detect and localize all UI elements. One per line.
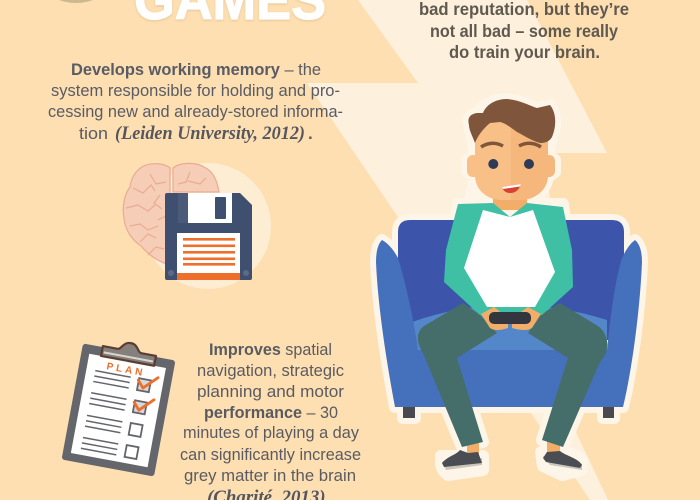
intro text: not all bad – some really [430, 21, 618, 41]
face [475, 122, 548, 200]
icon: brain and floppy disk [123, 163, 271, 289]
sofa back [398, 220, 624, 340]
text block: spatial navigation: grey matter in the brain [184, 466, 356, 485]
teal raglan shirt [444, 203, 573, 315]
intro text [419, 0, 629, 62]
intro text: do train your brain. [449, 42, 600, 62]
right shoe [543, 451, 582, 468]
checkboxes [125, 378, 151, 459]
icon: brain [123, 163, 219, 265]
text block: spatial navigation: Improves spatial [209, 340, 332, 359]
lightning bolt background shape [307, 0, 608, 500]
text block: working memory: cessing new and already-stored informa- [48, 102, 343, 121]
right leg [528, 303, 607, 447]
neck [493, 188, 527, 210]
text block: working memory: . [308, 124, 313, 143]
text block: working memory: system responsible for holding and pro- [51, 81, 340, 100]
left shoe [442, 450, 482, 467]
sofa feet [403, 405, 614, 418]
eyes [488, 159, 498, 169]
white sticker outline [376, 99, 642, 475]
text block: spatial navigation: navigation, strategic [197, 361, 344, 380]
text block: spatial navigation: minutes of playing a day [183, 423, 359, 442]
sofa cushion [412, 305, 607, 350]
sofa seat base [395, 350, 612, 407]
text block: spatial navigation: planning and motor [197, 382, 344, 401]
text block: spatial navigation: can significantly increase [180, 445, 361, 464]
game controller [489, 312, 531, 324]
text block: working memory [48, 60, 343, 144]
left ankle and right ankle [467, 440, 560, 456]
text block: working memory: Develops working memory – the [71, 60, 321, 79]
illustration: boy on sofa [376, 99, 642, 475]
ears [467, 155, 481, 177]
white shirt front [464, 210, 555, 307]
sofa left arm [376, 240, 440, 407]
sofa right arm [580, 240, 642, 407]
check marks [133, 374, 158, 413]
hands [481, 307, 541, 330]
icon: clipboard plan [62, 335, 177, 477]
clip [101, 338, 157, 366]
label: PLAN: PLAN [106, 361, 146, 379]
text block: working memory: (Leiden University, 2012) [115, 123, 305, 144]
partial badge at top [48, 0, 104, 3]
checklist lines [81, 371, 131, 455]
left leg [418, 303, 497, 447]
text block: spatial navigation: performance – 30 [204, 403, 338, 422]
hair [468, 99, 555, 143]
text block: working memory: tion [79, 124, 108, 143]
text block: spatial navigation [180, 340, 361, 500]
eyebrows [481, 143, 541, 147]
shoe soles [442, 456, 582, 470]
mouth [502, 184, 521, 193]
icon: floppy disk [165, 193, 252, 280]
